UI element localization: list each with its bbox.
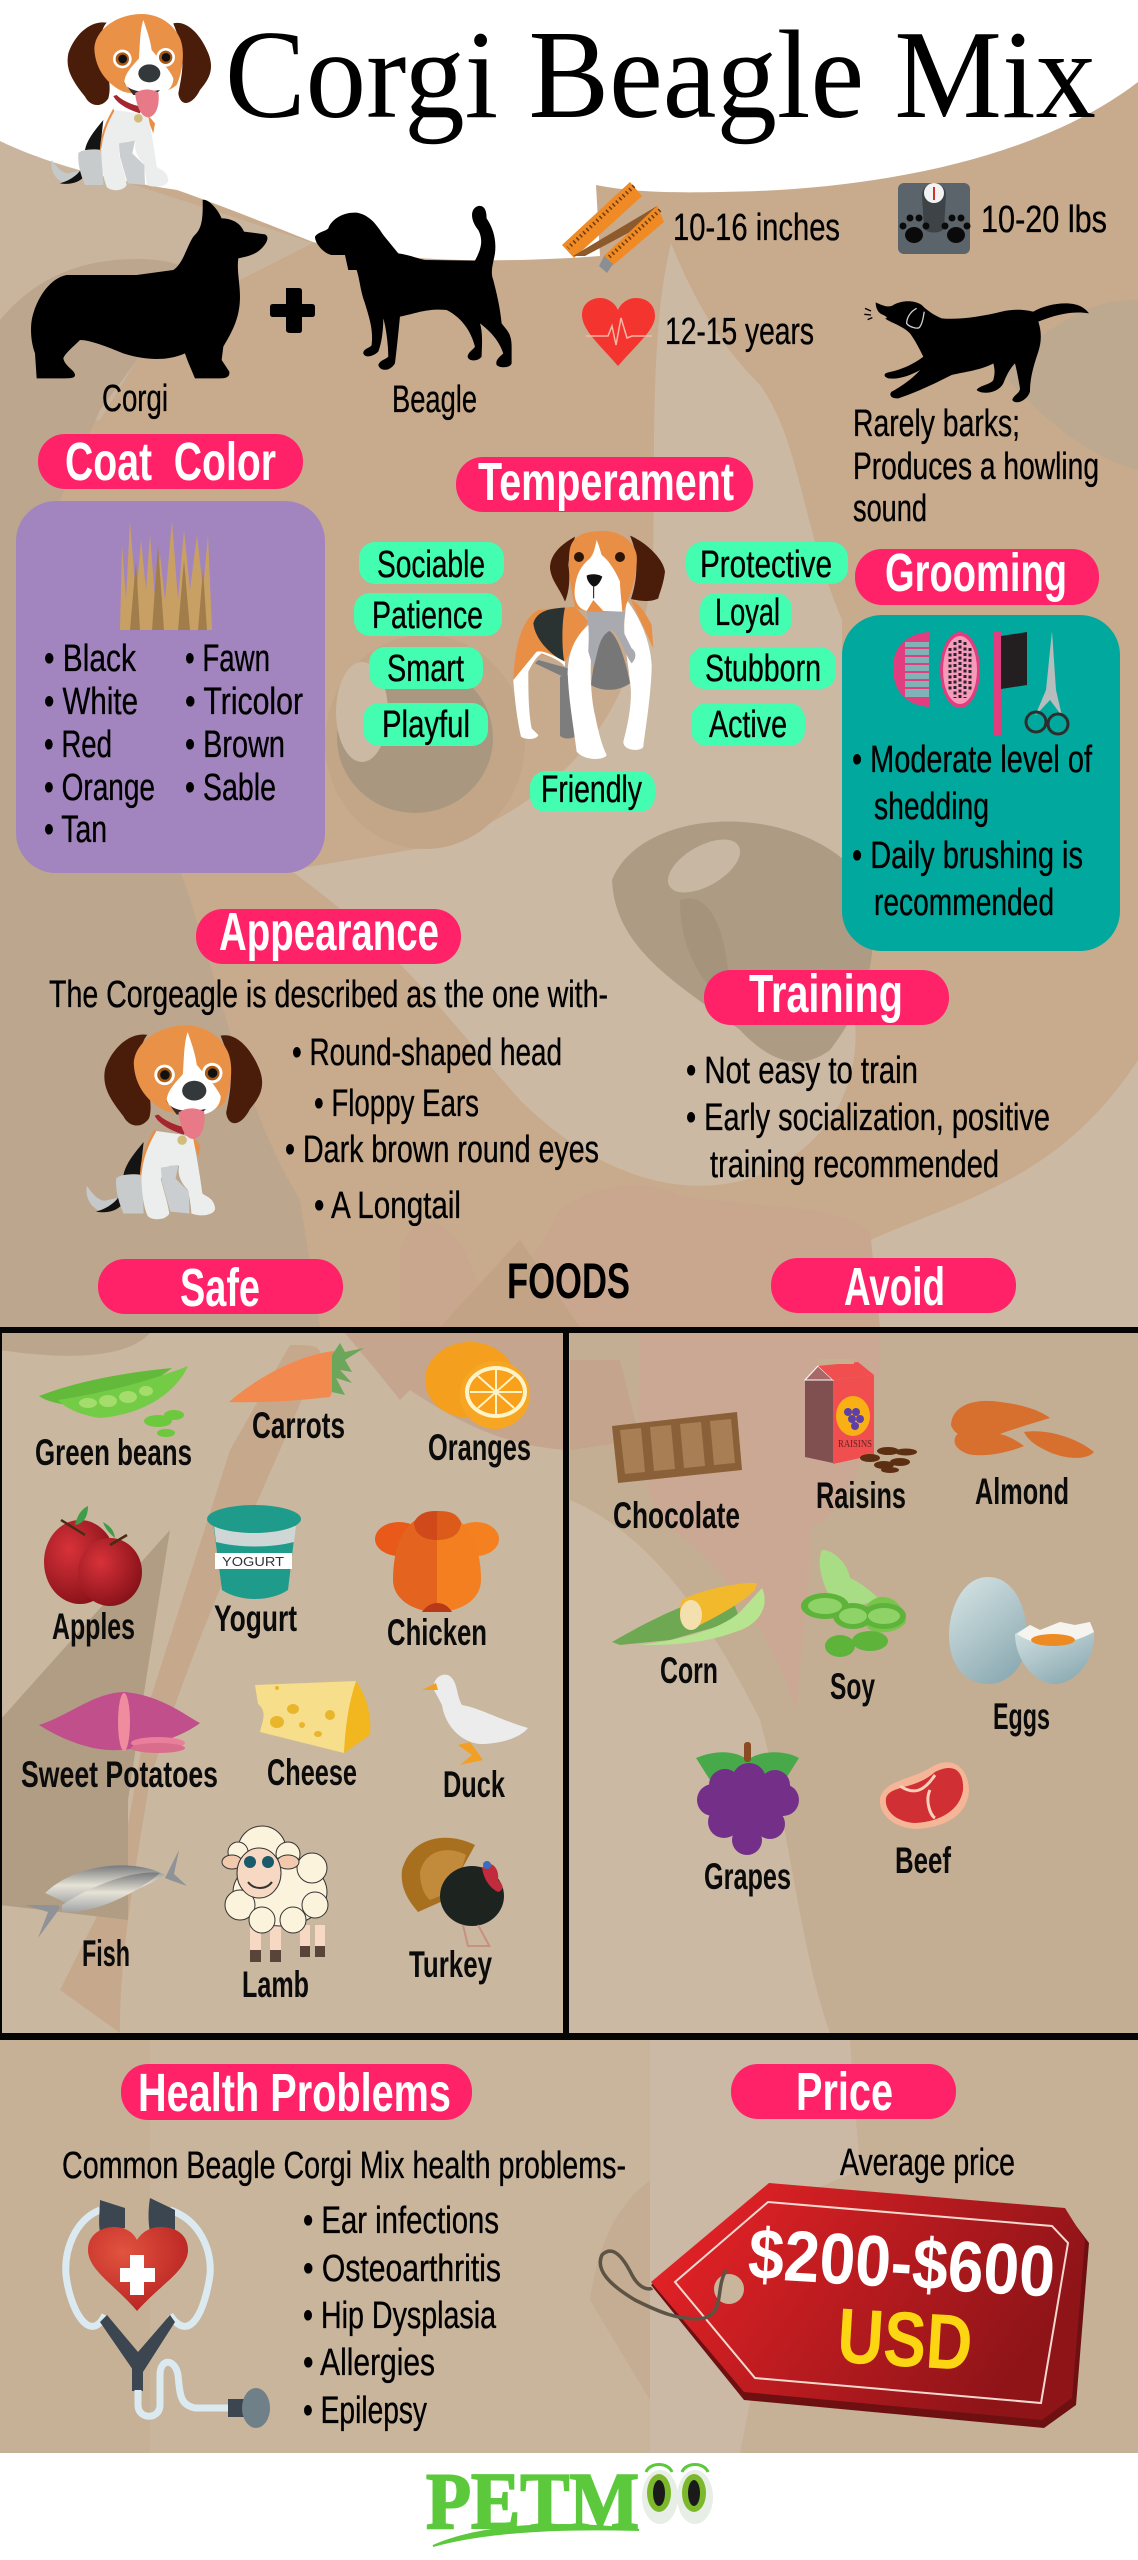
- training list: • Not easy to train: [686, 1050, 918, 1092]
- label: Oranges: Oranges: [428, 1427, 531, 1468]
- food: carrot: [229, 1343, 364, 1402]
- trait: Friendly: Friendly: [541, 769, 642, 811]
- trait: Protective: Protective: [700, 544, 832, 586]
- color list: • Tricolor: [185, 681, 303, 723]
- label: Sweet Potatoes: Sweet Potatoes: [21, 1754, 218, 1795]
- heading pill: Price: [731, 2062, 956, 2122]
- training list: training recommended: [710, 1144, 999, 1186]
- label: Beagle: Beagle: [392, 379, 477, 421]
- label: Yogurt: Yogurt: [214, 1598, 297, 1639]
- food: fish: [25, 1850, 187, 1938]
- label: Green beans: Green beans: [35, 1432, 192, 1473]
- trait: Playful: Playful: [382, 704, 470, 746]
- trait: Active: Active: [709, 704, 787, 746]
- food: yogurt: [207, 1505, 301, 1599]
- temperament traits: [354, 542, 848, 812]
- foods table frame: [0, 1327, 1138, 2040]
- label: Turkey: Turkey: [409, 1944, 492, 1985]
- color list: • Orange: [44, 767, 155, 809]
- color list: [44, 638, 303, 851]
- heading pill: Avoid: Avoid: [844, 1257, 945, 1317]
- grooming notes: recommended: [874, 882, 1054, 924]
- panel: grooming: [842, 615, 1120, 951]
- health list: • Allergies: [303, 2342, 435, 2384]
- food: chicken: [375, 1511, 499, 1612]
- label: lifespan: 12-15 years: [665, 311, 814, 353]
- icon: measuring tape: [562, 182, 664, 273]
- food: almonds: [951, 1401, 1094, 1458]
- yogurt label: YOGURT: [222, 1554, 284, 1569]
- label: Chocolate: Chocolate: [613, 1495, 740, 1536]
- heading pill: Price: Price: [796, 2062, 893, 2122]
- color list: • White: [44, 681, 138, 723]
- heading: FOODS: FOODS: [507, 1253, 630, 1309]
- health list: • Hip Dysplasia: [303, 2295, 497, 2337]
- color list: • Sable: [185, 767, 276, 809]
- label: Cheese: Cheese: [267, 1752, 357, 1793]
- price currency: USD: [835, 2291, 975, 2387]
- label: Raisins: Raisins: [816, 1475, 906, 1516]
- color list: • Black: [44, 638, 137, 680]
- barking note: [853, 403, 1099, 530]
- food: chocolate: [612, 1412, 742, 1483]
- label: Carrots: Carrots: [252, 1405, 345, 1446]
- color list: • Tan: [44, 809, 107, 851]
- label: Soy: Soy: [830, 1666, 875, 1707]
- title: Corgi Beagle Mix: [225, 6, 1096, 145]
- logo: PETMOO: PETM: [426, 2458, 639, 2546]
- heading pill: Safe: [98, 1258, 343, 1318]
- panel: safe foods: [21, 1342, 531, 2005]
- health list: • Ear infections: [303, 2200, 499, 2242]
- icon: beagle silhouette: [315, 206, 512, 370]
- food: eggs: [949, 1577, 1094, 1684]
- icon: grooming tools: [893, 631, 1068, 736]
- barking note: sound: [853, 488, 927, 530]
- trait: Loyal: [700, 592, 792, 636]
- food: corn: [612, 1583, 765, 1645]
- grooming notes: [852, 739, 1092, 924]
- heading pill: Coat Color: Coat Color: [65, 432, 276, 492]
- icon: standing beagle: [513, 531, 665, 759]
- appearance list: • Dark brown round eyes: [285, 1129, 599, 1171]
- heading pill: Temperament: Temperament: [478, 452, 734, 512]
- raisins box label: RAISINS: [838, 1438, 872, 1450]
- food: lamb: [222, 1826, 328, 1962]
- label: Almond: Almond: [975, 1471, 1069, 1512]
- icon: barking dog silhouette: [864, 301, 1089, 402]
- food: green beans: [39, 1366, 188, 1437]
- color list: • Red: [44, 724, 112, 766]
- label: Apples: Apples: [52, 1606, 135, 1647]
- label: Grapes: Grapes: [704, 1856, 791, 1897]
- label: Corn: Corn: [660, 1650, 718, 1691]
- price caption: Average price: [840, 2142, 1015, 2184]
- food: turkey: [402, 1838, 504, 1947]
- appearance list: [285, 1032, 599, 1227]
- color list: • Fawn: [185, 638, 270, 680]
- appearance list: • A Longtail: [314, 1185, 461, 1227]
- label: Fish: Fish: [82, 1933, 130, 1974]
- icon: stethoscope with heart: [66, 2198, 270, 2428]
- heading pill: Training: Training: [749, 964, 903, 1024]
- food: cheese: [255, 1681, 370, 1753]
- health intro: Common Beagle Corgi Mix health problems-: [62, 2145, 626, 2187]
- icon: weighing scale with paws: [898, 183, 970, 254]
- food: raisins: [805, 1359, 917, 1473]
- trait: Smart: Smart: [387, 648, 464, 690]
- label: height: 10-16 inches: [673, 207, 840, 249]
- trait: Sociable: Sociable: [377, 544, 485, 586]
- grooming notes: shedding: [874, 786, 989, 828]
- food: oranges: [425, 1342, 530, 1429]
- food: grapes: [696, 1742, 799, 1855]
- health list: [303, 2200, 501, 2432]
- heading pill: Appearance: Appearance: [219, 902, 439, 962]
- icon: fur: [120, 521, 212, 630]
- label: Lamb: Lamb: [242, 1964, 309, 2005]
- health list: • Epilepsy: [303, 2390, 427, 2432]
- white header shape: [0, 0, 1138, 260]
- icon: plus sign: [270, 288, 315, 333]
- appearance intro: The Corgeagle is described as the one with-: [49, 974, 608, 1016]
- heading pill: Grooming: Grooming: [885, 543, 1067, 603]
- footer band: [0, 2453, 1138, 2560]
- label: Duck: Duck: [443, 1764, 505, 1805]
- trait: Stubborn: Stubborn: [705, 648, 821, 690]
- panel: foods to avoid: [612, 1359, 1094, 1897]
- food: apples: [44, 1506, 142, 1606]
- icon: beagle puppy: [86, 1025, 262, 1219]
- food: soy: [801, 1550, 906, 1657]
- label: weight: 10-20 lbs: [981, 199, 1107, 241]
- icon: heart with pulse: [582, 298, 655, 366]
- food: sweet potato: [39, 1692, 200, 1753]
- panel: coat color: [16, 501, 325, 873]
- trait: Patience: Patience: [372, 595, 483, 637]
- food: beef: [880, 1762, 969, 1829]
- price value: $200-$600: [746, 2214, 1057, 2313]
- barking note: Rarely barks;: [853, 403, 1020, 445]
- label: Eggs: Eggs: [993, 1696, 1050, 1737]
- appearance list: • Round-shaped head: [292, 1032, 562, 1074]
- heading pill: Health Problems: Health Problems: [138, 2063, 451, 2123]
- trait: Loyal: Loyal: [715, 592, 780, 634]
- icon: cartoon beagle puppy: [51, 14, 211, 190]
- appearance list: • Floppy Ears: [314, 1083, 479, 1125]
- icon: red price tag: [600, 2183, 1089, 2428]
- label: Corgi: Corgi: [102, 378, 168, 420]
- color list: • Brown: [185, 724, 285, 766]
- training list: [686, 1050, 1050, 1186]
- label: Beef: Beef: [895, 1840, 951, 1881]
- heading pill: Safe: Safe: [180, 1258, 260, 1318]
- health list: • Osteoarthritis: [303, 2248, 501, 2290]
- icon: corgi silhouette: [31, 200, 267, 378]
- label: Chicken: Chicken: [387, 1612, 487, 1653]
- heading pill: Avoid: [771, 1257, 1016, 1317]
- food: duck: [422, 1675, 528, 1765]
